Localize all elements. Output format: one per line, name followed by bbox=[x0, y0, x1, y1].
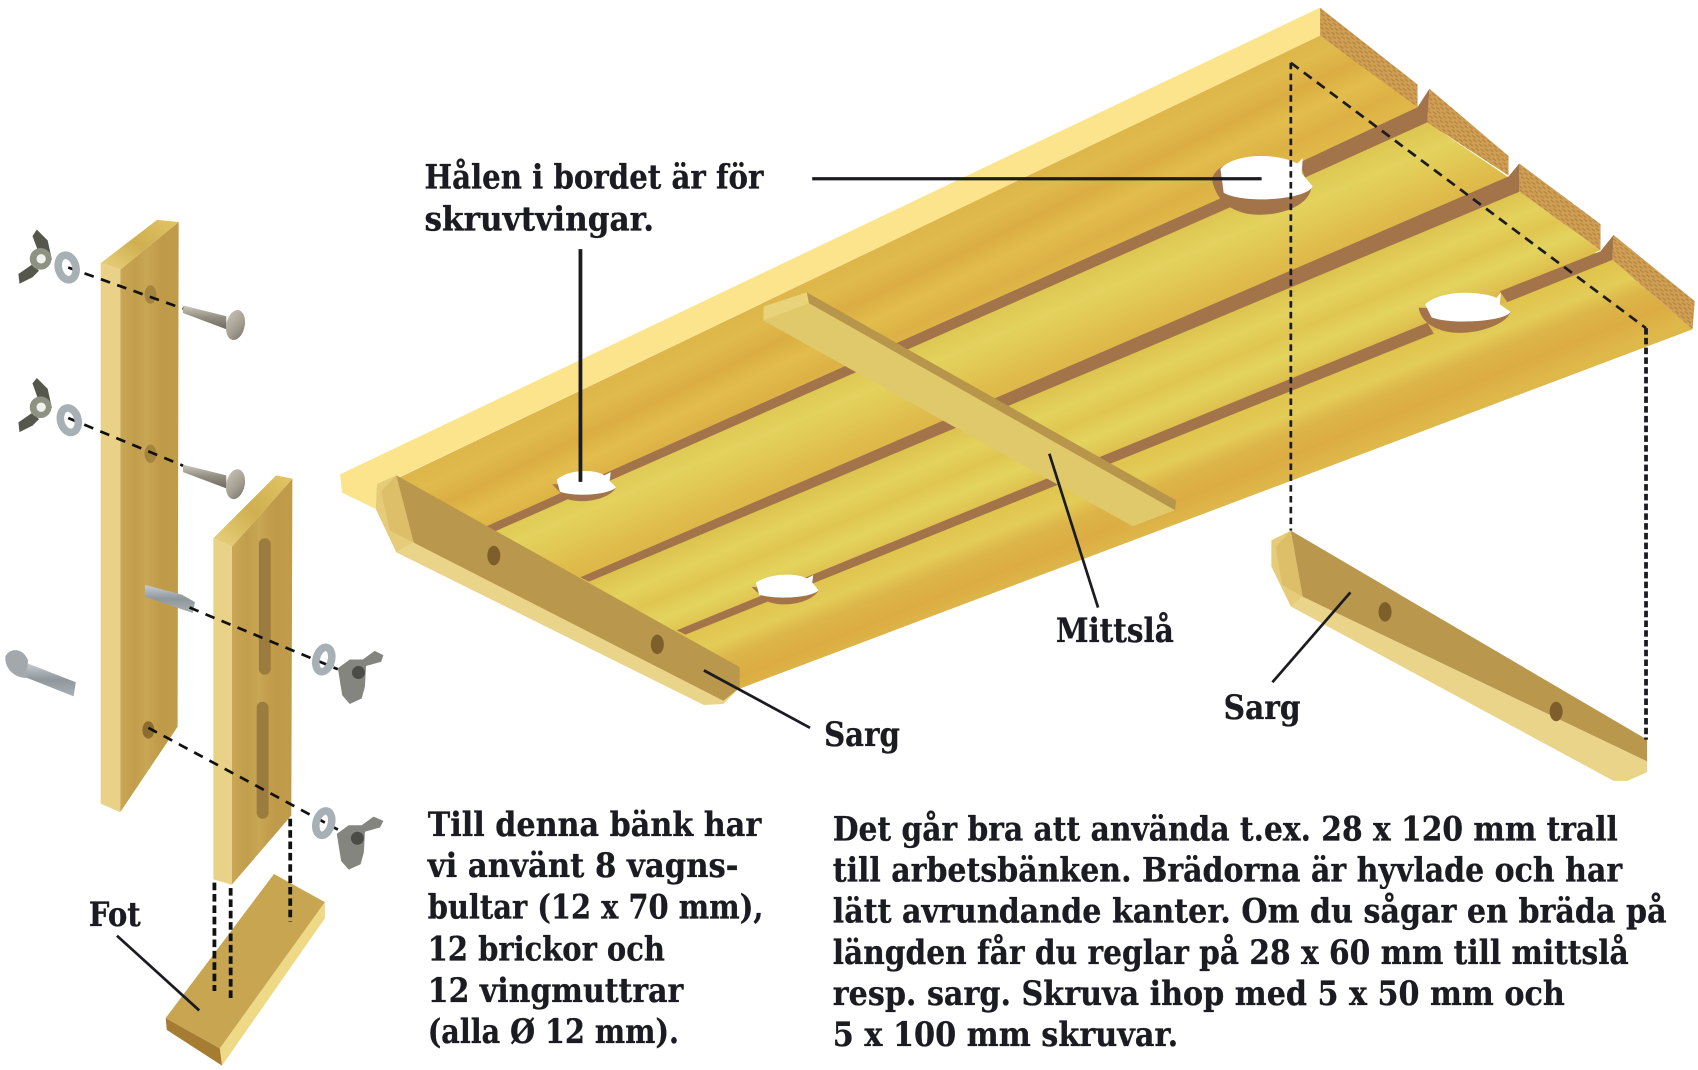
wing nut right lower bbox=[337, 817, 383, 870]
foot dashed lines bbox=[214, 819, 290, 1002]
board 4 bbox=[674, 260, 1693, 693]
label: Mittslå: Mittslå bbox=[1056, 610, 1174, 650]
wing nut top left bbox=[18, 230, 52, 284]
hole right bbox=[1419, 292, 1511, 333]
text block: materials: 12 vingmuttrar bbox=[428, 970, 684, 1010]
carriage bolt top bbox=[183, 305, 248, 342]
text block: materials: (alla Ø 12 mm). bbox=[428, 1011, 679, 1051]
foot bbox=[166, 874, 325, 1066]
sarg detached bbox=[1271, 531, 1647, 781]
board 3 bbox=[579, 192, 1601, 636]
text block: instructions: till arbetsbänken. Brädorna är hyvlade och har bbox=[833, 850, 1623, 890]
hole lower middle bbox=[752, 575, 819, 604]
hole upper right bbox=[1212, 156, 1312, 215]
long leg post bbox=[101, 220, 179, 812]
text block: instructions: Det går bra att använda t.ex. 28 x 120 mm trall bbox=[833, 808, 1618, 848]
fastener dashed lines bbox=[68, 268, 338, 830]
hole lower left bbox=[552, 471, 616, 501]
wing nut right upper bbox=[338, 651, 383, 704]
text block: materials bbox=[427, 804, 763, 1051]
long light edge of table bbox=[340, 8, 1320, 509]
leader lines bbox=[117, 179, 1350, 1010]
text block: materials: bultar (12 x 70 mm), bbox=[428, 886, 763, 926]
carriage bolt second bbox=[183, 465, 248, 501]
text block: materials: vi använt 8 vagns- bbox=[427, 845, 739, 885]
threaded bolt middle bbox=[145, 585, 195, 613]
label: Sarg left: Sarg bbox=[824, 714, 900, 754]
board 2 bbox=[487, 122, 1511, 582]
assembly dashed lines for sarg bbox=[1291, 63, 1646, 740]
brown gaps between boards bbox=[484, 89, 1614, 635]
board 1 bbox=[379, 36, 1421, 533]
mittslå crossbar bbox=[763, 292, 1176, 526]
text block: instructions bbox=[833, 808, 1667, 1054]
heading: holes note: Hålen i bordet är för bbox=[424, 156, 765, 196]
text block: instructions: 5 x 100 mm skruvar. bbox=[833, 1014, 1178, 1054]
label: Fot: Fot bbox=[89, 894, 141, 934]
table top bbox=[340, 8, 1695, 705]
heading: holes note: skruvtvingar. bbox=[424, 199, 654, 239]
text block: instructions: resp. sarg. Skruva ihop med 5 x 50 mm och bbox=[833, 973, 1565, 1013]
heading: holes note bbox=[424, 156, 765, 239]
sarg attached bbox=[376, 475, 740, 705]
washers bbox=[56, 253, 334, 837]
end grain board 3 bbox=[1519, 164, 1601, 250]
text block: materials: Till denna bänk har bbox=[428, 804, 762, 844]
end grain board 4 bbox=[1612, 235, 1695, 329]
end grain board 2 bbox=[1427, 89, 1508, 175]
underside backing bbox=[379, 36, 1693, 693]
label: Sarg right: Sarg bbox=[1224, 687, 1301, 727]
wing nut second left bbox=[18, 378, 52, 432]
short leg post bbox=[213, 475, 292, 885]
text block: materials: 12 brickor och bbox=[428, 929, 665, 969]
end grain board 1 bbox=[1320, 8, 1418, 107]
carriage bolt lower left bbox=[5, 650, 76, 696]
